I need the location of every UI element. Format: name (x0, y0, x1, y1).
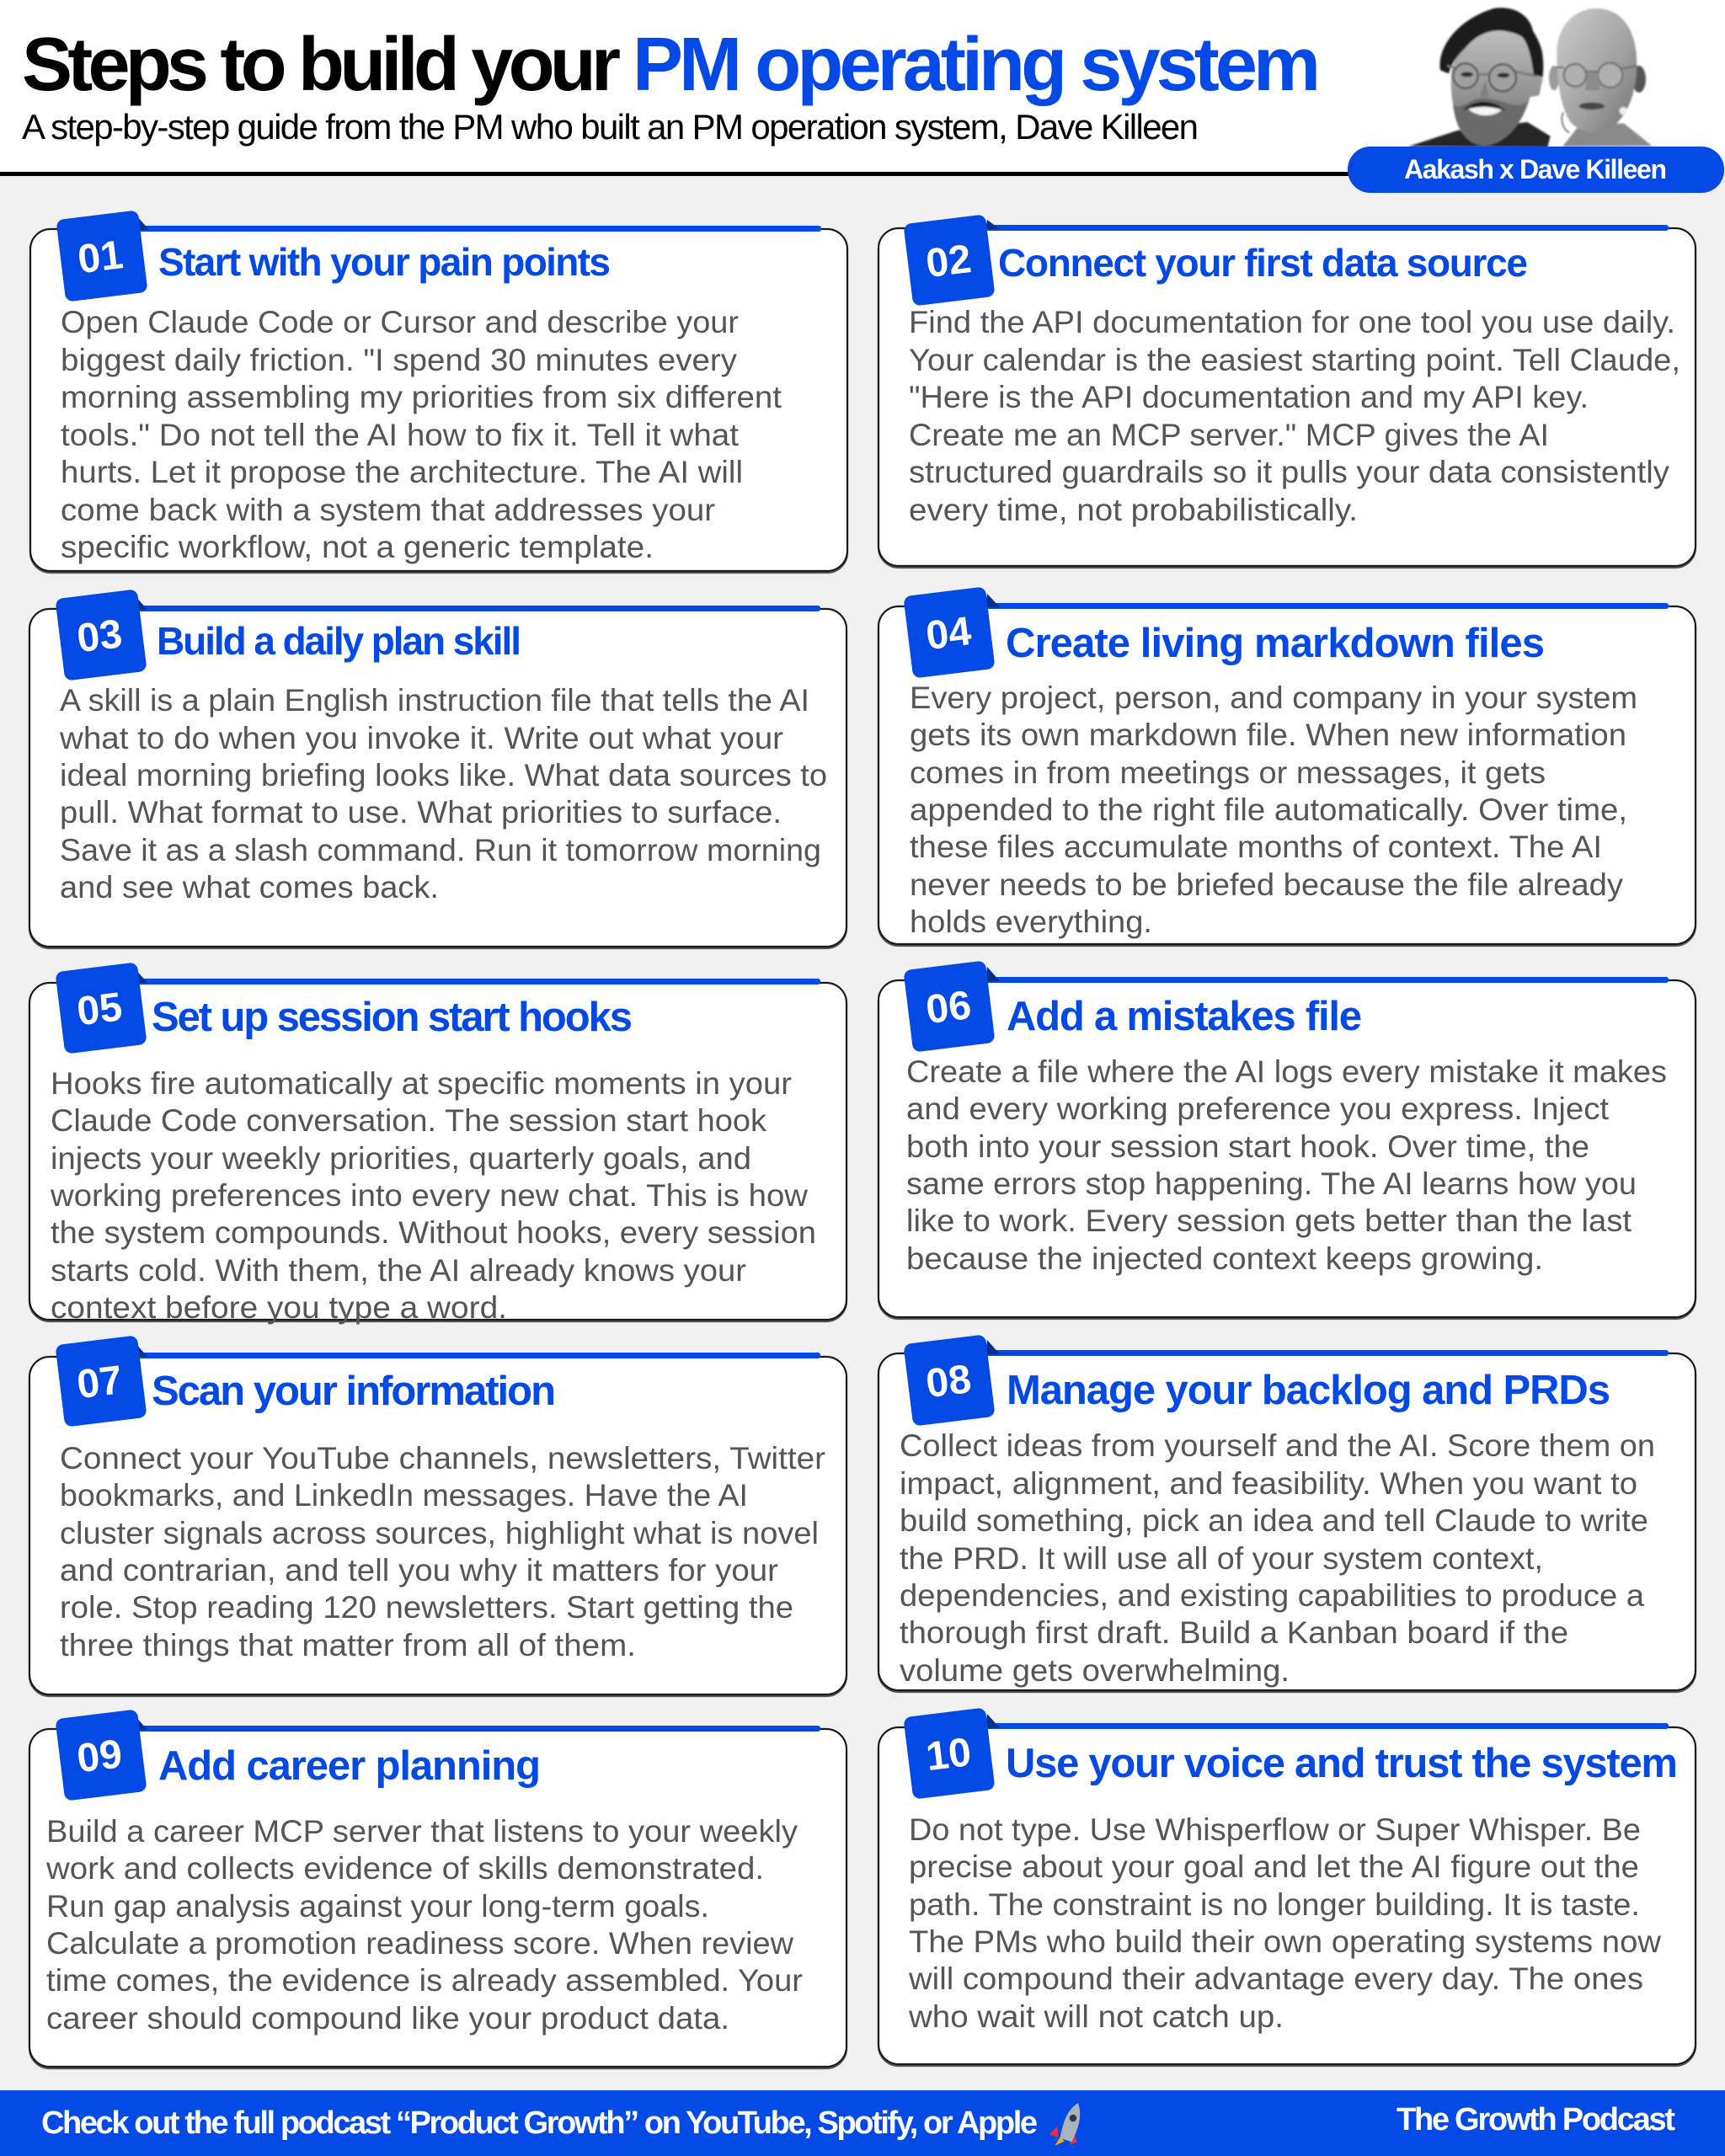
body 02: Find the API documentation for one tool you use daily. (909, 305, 1675, 339)
name pill (1348, 147, 1724, 193)
panel: step 08 (879, 1334, 1696, 1690)
heading 03: Build a daily plan skill (157, 619, 521, 663)
body 08: impact, alignment, and feasibility. When you want to (900, 1466, 1637, 1501)
badge 01 (56, 210, 148, 302)
portrait: Dave Killeen (1549, 8, 1653, 147)
portrait: Aakash (1408, 8, 1551, 147)
panel: step 09 (29, 1709, 846, 2067)
footer call to action: Check out the full podcast “Product Growth” on YouTube, Spotify, or Apple (41, 2105, 1038, 2141)
body 02: Create me an MCP server." MCP gives the AI (909, 418, 1549, 452)
heading 06: Add a mistakes file (1007, 994, 1362, 1039)
panel: step 06 (879, 960, 1696, 1317)
panel: step 03 (29, 589, 846, 947)
body 07: role. Stop reading 120 newsletters. Start getting the (60, 1590, 793, 1625)
badge 09 (55, 1709, 147, 1801)
body 10: will compound their advantage every day. The ones (908, 1961, 1643, 1996)
body 05: injects your weekly priorities, quarterly goals, and (51, 1141, 751, 1176)
body 10 (908, 1812, 1661, 2034)
subtitle: A step-by-step guide from the PM who built an PM operation system, Dave Killeen (22, 107, 1199, 147)
panel: step 04 (879, 586, 1696, 944)
body 04: comes in from meetings or messages, it gets (910, 755, 1546, 790)
body 09: work and collects evidence of skills demonstrated. (45, 1851, 764, 1886)
panel: step 07 (29, 1335, 846, 1694)
body 05 (50, 1066, 816, 1325)
body 02 (909, 305, 1680, 527)
heading 08: Manage your backlog and PRDs (1007, 1368, 1610, 1413)
body 03: ideal morning briefing looks like. What data sources to (60, 758, 827, 792)
body 03: what to do when you invoke it. Write out what your (59, 721, 783, 755)
heading 05: Set up session start hooks (152, 995, 633, 1040)
badge 10: 10 (923, 1730, 974, 1780)
panel: step 02 (879, 214, 1696, 566)
body 06: and every working preference you express. Inject (906, 1091, 1610, 1126)
badge 08 (903, 1334, 996, 1427)
body 05: starts cold. With them, the AI already knows your (51, 1253, 746, 1288)
body 01 (61, 305, 782, 564)
body 01: come back with a system that addresses your (61, 493, 715, 527)
body 03: Save it as a slash command. Run it tomorrow morning (60, 833, 821, 867)
body 03: and see what comes back. (60, 870, 439, 905)
badge 03 (55, 589, 147, 681)
body 04: appended to the right file automatically. Over time, (910, 792, 1627, 827)
body 04: never needs to be briefed because the file already (910, 867, 1624, 902)
body 08: thorough first draft. Build a Kanban board if the (900, 1615, 1568, 1650)
body 09: Calculate a promotion readiness score. When review (46, 1926, 793, 1961)
badge 02: 02 (923, 237, 974, 286)
badge 06 (903, 960, 996, 1053)
body 08: Collect ideas from yourself and the AI. Score them on (900, 1428, 1655, 1463)
body 05: working preferences into every new chat. This is how (50, 1178, 808, 1213)
body 01: specific workflow, not a generic template. (61, 530, 654, 564)
body 07: Connect your YouTube channels, newsletters, Twitter (60, 1441, 825, 1476)
body 02: "Here is the API documentation and my API key. (909, 380, 1589, 414)
body 06: like to work. Every session gets better than the last (906, 1203, 1632, 1238)
title: Steps to build your (22, 23, 621, 107)
body 09: time comes, the evidence is already assembled. Your (46, 1963, 803, 1998)
body 08: volume gets overwhelming. (900, 1653, 1290, 1688)
body 10: path. The constraint is no longer building. It is taste. (909, 1887, 1640, 1922)
body 01: biggest daily friction. "I spend 30 minutes every (61, 343, 738, 377)
title: PM operating system (633, 23, 1321, 107)
body 10: The PMs who build their own operating systems now (909, 1924, 1661, 1959)
body 04: holds everything. (910, 905, 1152, 939)
panel: step 05 (29, 962, 846, 1325)
body 06: same errors stop happening. The AI learns how you (906, 1166, 1637, 1201)
body 06: because the injected context keeps growing. (906, 1241, 1543, 1276)
body 06 (906, 1054, 1667, 1276)
badge 04 (903, 586, 996, 679)
body 10: precise about your goal and let the AI figure out the (909, 1849, 1639, 1884)
heading 02: Connect your first data source (998, 241, 1528, 285)
badge 10 (903, 1707, 996, 1800)
body 08: dependencies, and existing capabilities to produce a (900, 1578, 1644, 1613)
badge 06: 06 (923, 983, 974, 1033)
body 01: tools." Do not tell the AI how to fix it. Tell it what (61, 418, 740, 452)
body 03: pull. What format to use. What priorities to surface. (60, 795, 782, 830)
body 02: every time, not probabilistically. (909, 493, 1358, 527)
heading 10: Use your voice and trust the system (1006, 1741, 1678, 1786)
badge 08: 08 (923, 1357, 974, 1406)
body 08 (900, 1428, 1655, 1688)
badge 04: 04 (923, 609, 974, 659)
body 06: both into your session start hook. Over time, the (906, 1129, 1589, 1164)
body 04: Every project, person, and company in your system (910, 680, 1637, 715)
body 06: Create a file where the AI logs every mistake it makes (906, 1054, 1667, 1089)
body 09: Build a career MCP server that listens to your weekly (46, 1814, 798, 1849)
body 05: Claude Code conversation. The session start hook (51, 1103, 767, 1138)
body 07: bookmarks, and LinkedIn messages. Have the AI (60, 1478, 748, 1513)
body 07: three things that matter from all of them. (60, 1628, 636, 1662)
badge 03: 03 (74, 611, 125, 661)
body 07 (60, 1441, 825, 1662)
badge 05 (55, 962, 147, 1054)
badge 09: 09 (74, 1732, 125, 1781)
body 04: gets its own markdown file. When new information (910, 718, 1626, 752)
body 02: Your calendar is the easiest starting point. Tell Claude, (909, 343, 1680, 377)
heading 01: Start with your pain points (158, 240, 611, 284)
body 08: the PRD. It will use all of your system context, (900, 1541, 1543, 1576)
badge 07 (55, 1335, 147, 1428)
portraits of Aakash and Dave Killeen (1408, 8, 1653, 147)
body 04: these files accumulate months of context. The AI (910, 830, 1602, 864)
badge 07: 07 (74, 1358, 125, 1407)
body 01: morning assembling my priorities from six different (61, 380, 782, 414)
body 08: build something, pick an idea and tell Claude to write (900, 1503, 1648, 1538)
body 04 (910, 680, 1637, 939)
name pill: Aakash x Dave Killeen (1404, 154, 1667, 184)
icon: rocket (1046, 2098, 1089, 2152)
body 07: cluster signals across sources, highlight what is novel (60, 1516, 819, 1550)
body 05: context before you type a word. (51, 1290, 507, 1325)
header band (0, 0, 1725, 176)
body 03 (59, 683, 827, 905)
body 07: and contrarian, and tell you why it matters for your (60, 1553, 778, 1588)
body 01: hurts. Let it propose the architecture. The AI will (61, 455, 743, 489)
body 05: the system compounds. Without hooks, every session (51, 1215, 816, 1250)
body 05: Hooks fire automatically at specific moments in your (51, 1066, 792, 1101)
badge 01: 01 (75, 232, 126, 282)
body 09 (45, 1814, 803, 2036)
panel: step 01 (30, 210, 847, 571)
body 03: A skill is a plain English instruction file that tells the AI (60, 683, 809, 718)
title (22, 23, 1321, 107)
heading 07: Scan your information (152, 1369, 556, 1414)
body 09: Run gap analysis against your long-term goals. (46, 1889, 709, 1924)
heading 09: Add career planning (158, 1743, 541, 1789)
badge 05: 05 (74, 985, 125, 1034)
body 01: Open Claude Code or Cursor and describe your (61, 305, 739, 339)
body 10: who wait will not catch up. (908, 1999, 1284, 2034)
footer bar (0, 2090, 1725, 2156)
body 02: structured guardrails so it pulls your data consistently (909, 455, 1670, 489)
panel: step 10 (879, 1707, 1696, 2064)
body 10: Do not type. Use Whisperflow or Super Whisper. Be (909, 1812, 1641, 1847)
footer brand: The Growth Podcast (1397, 2102, 1675, 2137)
badge 02 (903, 214, 996, 307)
heading 04: Create living markdown files (1006, 621, 1545, 666)
body 09: career should compound like your product data. (46, 2001, 729, 2036)
